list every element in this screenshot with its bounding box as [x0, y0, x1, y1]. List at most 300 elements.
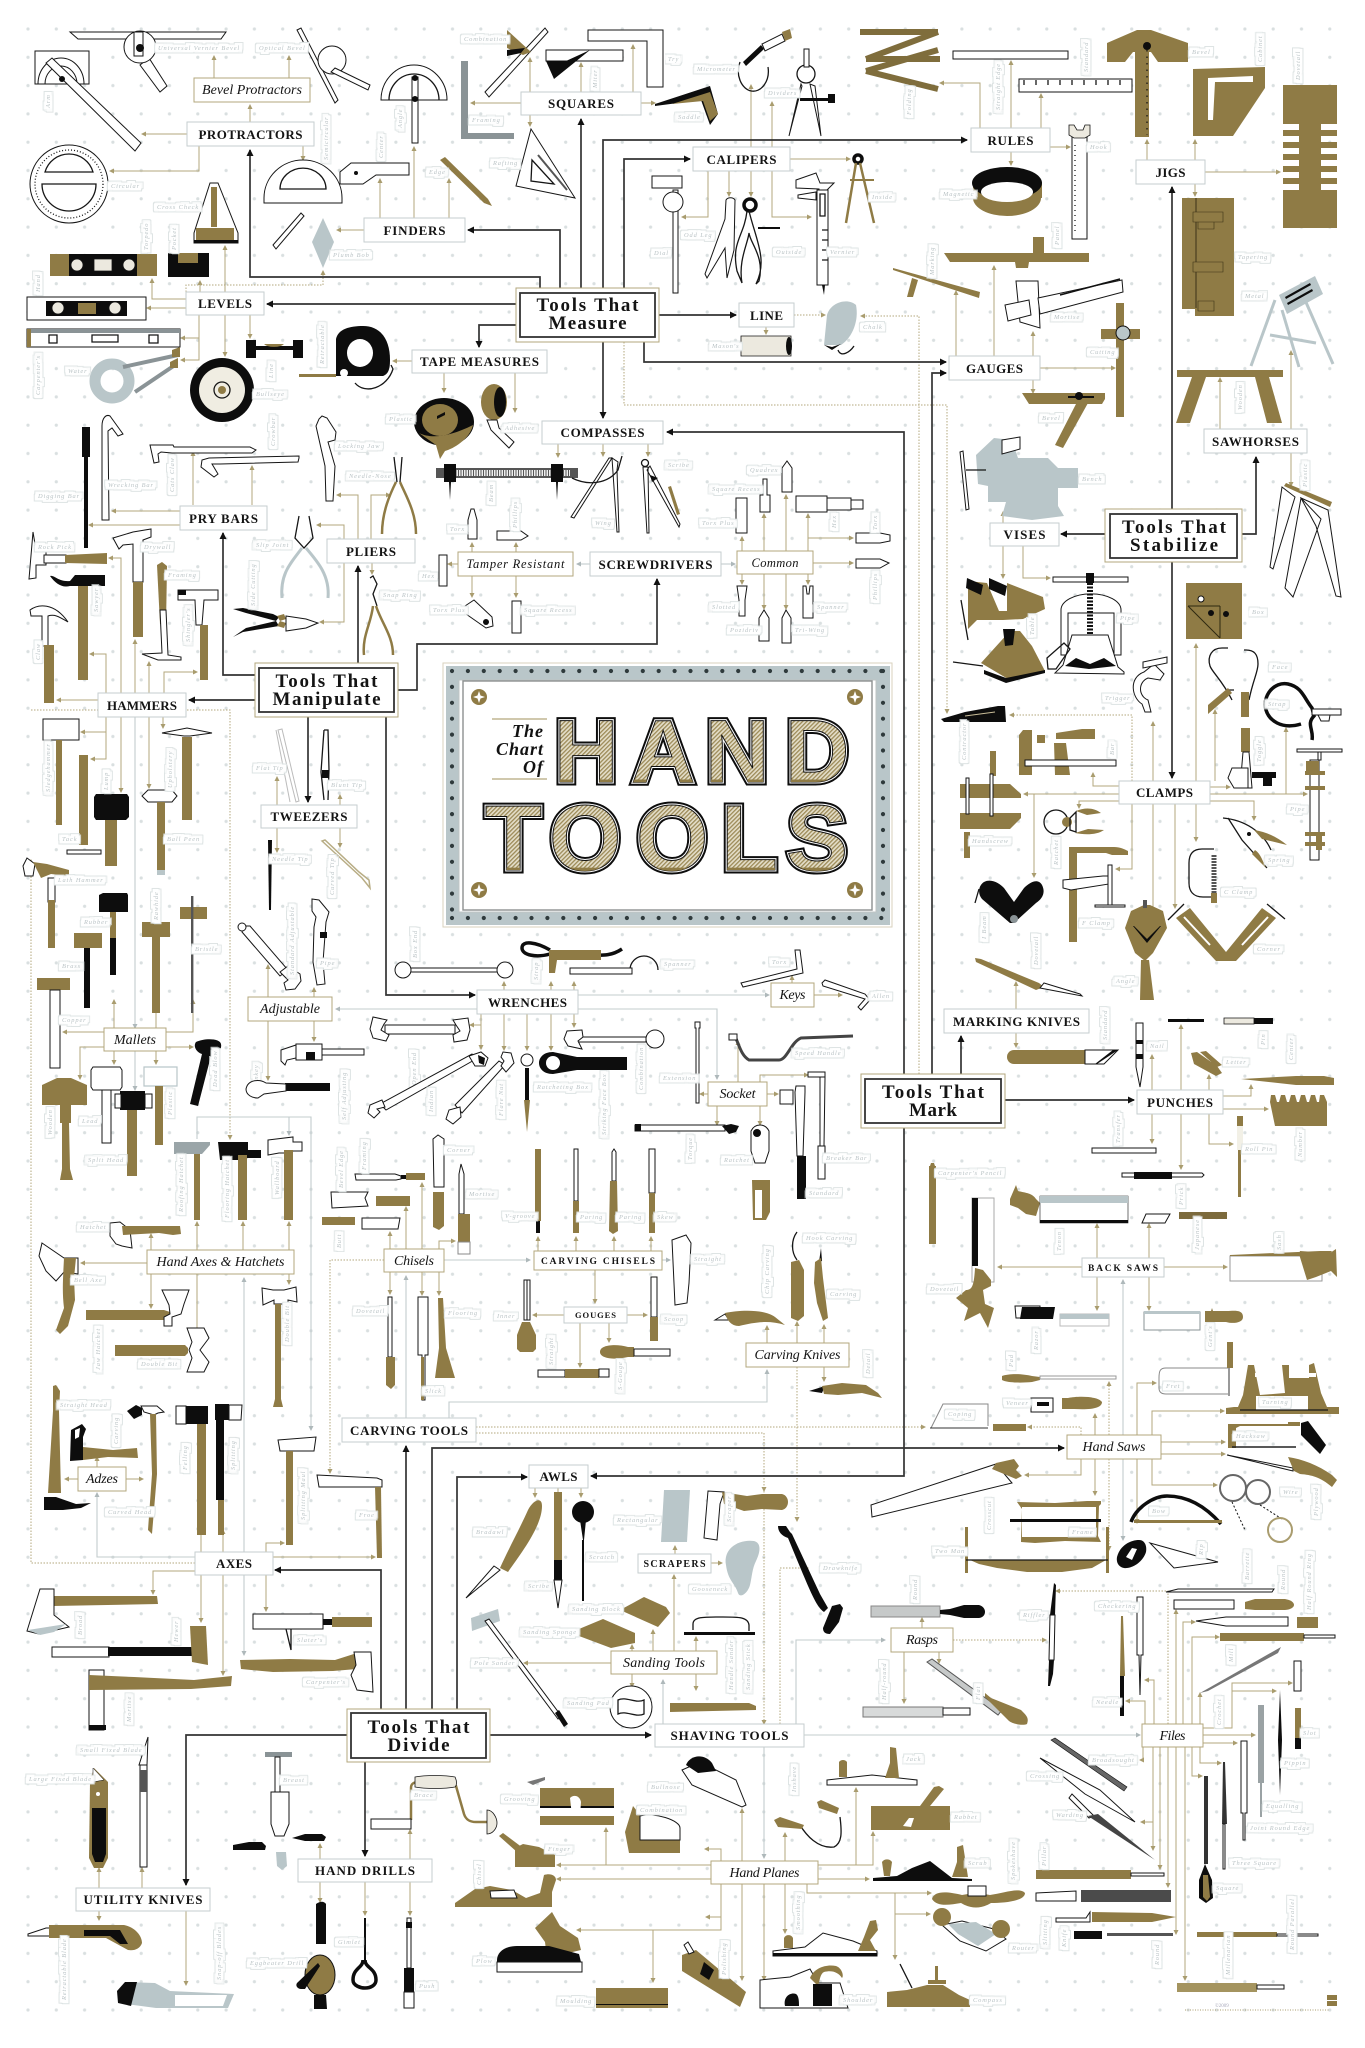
icon: cross check level [157, 183, 238, 243]
icon: wooden sawhorse: Wooden [1237, 384, 1244, 410]
icon: straight head adze [44, 1385, 108, 1510]
icon: carving knife: Carving [830, 1291, 857, 1298]
icon: sanding pad [567, 1686, 652, 1728]
icon: open end wrench: Open End [411, 1052, 418, 1085]
label: FINDERS: FINDERS [384, 223, 446, 238]
icon: flare nut wrench [446, 1052, 514, 1124]
icon: butt chisel [322, 1217, 400, 1248]
icon: butt chisel: Butt [336, 1234, 343, 1248]
icon: flat tip tweezers: Flat Tip [255, 765, 284, 772]
icon: smoothing plane: Smoothing [795, 1895, 802, 1930]
icon: chip carving knife [715, 1248, 785, 1326]
label: PUNCHES [1137, 1090, 1223, 1114]
icon: pocket level: Pocket [171, 227, 178, 251]
icon: hand level: Hand [35, 274, 42, 293]
label: Mallets: Mallets [113, 1033, 157, 1048]
icon: push drill [404, 1918, 435, 2008]
label: CARVING TOOLS [342, 1418, 476, 1442]
icon: split head mallet: Split Head [88, 1157, 124, 1164]
icon: sanding sponge [523, 1619, 635, 1648]
icon: veneer saw [1006, 1397, 1102, 1412]
main category: Tools That Divide: Divide [388, 1735, 450, 1756]
icon: straight gouge [538, 1337, 609, 1378]
icon: pippin file [1278, 1690, 1306, 1795]
icon: tri-wing bit [782, 610, 825, 643]
label: SAWHORSES [1204, 429, 1307, 453]
icon: hacksaw [1228, 1421, 1326, 1454]
icon: adhesive tape measure [481, 384, 535, 448]
icon: wooden sawhorse [1176, 370, 1283, 423]
icon: ratchet wrench: Ratchet [723, 1157, 750, 1164]
icon: toggle clamp: Toggle [1256, 739, 1263, 762]
icon: slip joint pliers [256, 516, 328, 598]
icon: drawknife: Drawknife [822, 1565, 858, 1572]
icon: rectangular scraper [616, 1490, 690, 1542]
label: TWEEZERS: TWEEZERS [270, 809, 348, 824]
label: PROTRACTORS [187, 122, 314, 146]
label: SQUARES [521, 92, 641, 115]
icon: pillar file: Pillar [1041, 1846, 1048, 1867]
icon: scribe compass: Scribe [668, 462, 690, 469]
label: RULES [971, 128, 1050, 152]
icon: sawyer hammer: Sawyer [93, 588, 100, 612]
icon: tack hammer: Tack [62, 836, 77, 843]
icon: pad saw [1002, 1354, 1116, 1383]
icon: tri-wing bit: Tri-Wing [795, 627, 825, 634]
icon: scratch awl: Scratch [589, 1554, 615, 1561]
icon: hex extension bit: Hex [831, 515, 838, 529]
label: Bevel Protractors [194, 78, 310, 102]
icon: hook rule: Hook [1089, 144, 1107, 151]
icon: bullseye level [190, 358, 285, 422]
icon: bullnose plane [651, 1756, 746, 1807]
icon: bristle mallet: Bristle [195, 946, 218, 953]
icon: C clamp: C Clamp [1224, 889, 1253, 896]
label: GAUGES [949, 356, 1040, 380]
icon: bench vise [960, 437, 1102, 520]
screws [471, 689, 863, 898]
label: VISES: VISES [1004, 527, 1046, 542]
icon: crosscut saw: Crosscut [986, 1500, 993, 1530]
tool group: rules [860, 32, 1132, 239]
icon: coping saw [930, 1404, 1026, 1431]
icon: millenary file [1197, 1932, 1318, 1976]
icon: hook carving knife [791, 1232, 853, 1321]
main category: Tools That Mark [861, 1074, 1005, 1128]
icon: C clamp [1189, 849, 1253, 903]
icon: hatchet: Hatchet [79, 1224, 107, 1231]
icon: rip saw [1117, 1540, 1218, 1568]
icon: retractable tape measure: Retractable [319, 324, 326, 365]
title text: TOOLS: TOOLS [485, 786, 848, 890]
icon: pole sander: Pole Sander [473, 1660, 515, 1667]
icon: pin punch [1168, 1018, 1273, 1046]
icon: plumb bob [273, 213, 370, 268]
icon: tack hammer [62, 755, 101, 854]
icon: checkering file [1098, 1597, 1143, 1695]
icon: barrette file [1166, 1552, 1274, 1592]
icon: dovetail jig: Dovetail [1295, 51, 1302, 81]
label: Socket [708, 1082, 767, 1106]
icon: push drill: Push [418, 1983, 435, 1990]
label: PUNCHES: PUNCHES [1147, 1095, 1213, 1110]
icon: inner gouge [496, 1280, 536, 1352]
icon: lump hammer: Lump [103, 772, 110, 791]
label: PRY BARS [180, 506, 267, 530]
icon: barrette file: Barrette [1244, 1552, 1251, 1580]
label: Keys [771, 983, 814, 1007]
label: SHAVING TOOLS [655, 1724, 804, 1747]
label: Chisels: Chisels [394, 1254, 435, 1269]
icon: vernier calipers [796, 173, 855, 295]
icon: gimlet [338, 1918, 376, 1988]
icon: shoulder plane: Shoulder [843, 1997, 873, 2004]
label: Hand Planes: Hand Planes [728, 1866, 800, 1881]
title text: TOOLS: TOOLS [485, 786, 848, 890]
icon: torx key: Torx [772, 959, 787, 966]
icon: framing hammer: Framing [167, 572, 197, 579]
icon: bevel gauge: Bevel [1042, 415, 1061, 422]
icon: wooden mallet [42, 1078, 87, 1180]
icon: mill file: Mill [1228, 1648, 1235, 1663]
icon: nail punch [1136, 1023, 1165, 1087]
icon: outside calipers: Outside [776, 249, 802, 256]
icon: slitting file [1036, 1890, 1171, 1945]
icon: tenon saw: Tenon [1056, 1231, 1063, 1251]
icon: box end wrench: Box End [412, 930, 419, 958]
icon: paring tall chisel: Paring [618, 1214, 642, 1221]
tool group: jigs [1107, 30, 1337, 316]
icon: strap clamp: Strap [1268, 701, 1286, 708]
icon: detail knife: Detail [865, 1353, 872, 1375]
icon: needle file: Needle [1095, 1699, 1119, 1706]
icon: polishing plane: Polishing [721, 1942, 728, 1976]
icon: corner clamp [1168, 904, 1285, 961]
icon: common phillips bit: Phillips [872, 573, 879, 601]
label: LEVELS [186, 292, 264, 315]
icon: combination wrench [564, 1030, 664, 1090]
icon: slotted bit: Slotted [712, 604, 736, 611]
icon: scribe compass [642, 460, 690, 533]
label: AWLS: AWLS [540, 1469, 578, 1484]
icon: flooring chisel: Flooring [447, 1310, 478, 1317]
icon: bevel edge chisel [331, 1150, 410, 1208]
icon: plow plane: Plow [475, 1958, 493, 1965]
tool group: protractors [30, 28, 492, 268]
label: PROTRACTORS: PROTRACTORS [198, 127, 302, 142]
icon: straight head adze: Straight Head [60, 1402, 108, 1409]
tool group: mallets [37, 978, 221, 1180]
icon: curved head axe [108, 1405, 164, 1534]
icon: odd leg calipers: Odd Leg [684, 232, 712, 239]
icon: joint round edge file: Joint Round Edge [1250, 1825, 1310, 1832]
icon: turning saw: Turning [1262, 1399, 1289, 1406]
icon: scorp: Inshave [791, 1766, 798, 1793]
icon: flat tip tweezers [255, 729, 299, 802]
icon: straight edge: Straight Edge [995, 63, 1002, 110]
icon: skew chisel [649, 1149, 674, 1233]
icon: bell axe [39, 1243, 103, 1334]
icon: magnetic tape [942, 167, 1042, 216]
icon: contractor clamp: Contractor [961, 723, 968, 760]
icon: torque wrench [635, 1124, 739, 1160]
label: PRY BARS: PRY BARS [189, 511, 258, 526]
icon: chalkstone jig [1193, 35, 1265, 136]
label: WRENCHES [477, 990, 578, 1014]
icon: marking gauge [893, 247, 980, 298]
icon: veneer saw: Veneer [1006, 1400, 1029, 1407]
icon: wallboard hatchet [268, 1137, 302, 1220]
tool group: hammers [23, 529, 218, 1013]
icon: scoop gouge [650, 1277, 684, 1341]
main category: Tools That Stabilize: Tools That [1122, 517, 1227, 538]
icon: rectangular scraper: Rectangular [616, 1517, 658, 1524]
icon: mortise chisel [458, 1164, 495, 1254]
icon: curved head axe: Curved Head [108, 1509, 152, 1516]
title text: The Chart Of: Of [523, 757, 545, 777]
icon: saddle square [655, 86, 718, 125]
icon: brad awl [466, 1500, 542, 1598]
icon: plastic tape measure: Plastic [388, 416, 413, 423]
icon: standard adjustable wrench [238, 906, 301, 990]
tool group: awls and scrapers [466, 1490, 858, 1728]
icon: box end wrench [395, 930, 513, 978]
icon: double bit hatchet: Double Bit [140, 1361, 178, 1368]
icon: slick chisel [418, 1297, 442, 1400]
icon: joint round edge file [1241, 1741, 1310, 1840]
tool group: files [1022, 1552, 1335, 1992]
label: JIGS [1136, 160, 1205, 184]
icon: carpenter's pencil: Carpenter's Pencil [938, 1170, 1002, 1177]
title text: HAND: HAND [554, 701, 849, 801]
icon: brace [371, 1776, 497, 1834]
label: Sanding Tools: Sanding Tools [623, 1656, 706, 1671]
icon: bullseye level: Bullseye [256, 391, 285, 398]
icon: snap-off blade knife: Snap-off Blades [216, 1926, 223, 1980]
icon: crochet file [1200, 1647, 1281, 1725]
icon: three square file: Three Square [1232, 1860, 1277, 1867]
icon: lump hammer [94, 772, 129, 866]
icon: wooden mallet: Wooden [47, 1109, 54, 1135]
icon: corner chisel [433, 1135, 471, 1230]
icon: router plane [933, 1908, 1035, 1952]
icon: common torx plus bit [702, 498, 747, 533]
icon: scribe awl [528, 1492, 562, 1608]
label: Files: Files [1158, 1729, 1186, 1744]
icon: mortise gauge [1005, 279, 1123, 328]
icon: handle sander [684, 1617, 755, 1691]
label: HAMMERS: HAMMERS [107, 698, 177, 713]
icon: paring tall chisel [609, 1149, 642, 1234]
icon: carpenter's level [27, 329, 180, 395]
icon: pipe clamp: Pipe [1289, 806, 1305, 813]
label: RULES: RULES [988, 133, 1034, 148]
icon: rock pick [29, 532, 107, 579]
icon: center punch [1241, 1037, 1334, 1085]
icon: smoothing plane [773, 1895, 878, 1956]
icon: needle tip tweezers [268, 840, 309, 910]
label: HAND DRILLS [298, 1859, 432, 1882]
icon: roofing hatchet [174, 1142, 210, 1220]
icon: torx plus bit: Torx Plus [433, 607, 466, 614]
icon: knife handle file: Slot [1303, 1730, 1317, 1737]
icon: pipe vise [1047, 573, 1135, 674]
icon: torque wrench: Torque [687, 1137, 694, 1160]
label: GOUGES [564, 1307, 627, 1323]
icon: retractable blade knife [28, 1925, 142, 2001]
tool group: keys and sockets [635, 950, 890, 1220]
icon: common torx plus bit: Torx Plus [702, 520, 735, 527]
icon: paring carving chisel [573, 1149, 603, 1233]
label: SCRAPERS: SCRAPERS [644, 1559, 706, 1570]
icon: framing hammer [142, 562, 197, 660]
icon: pippin file: Pippin [1283, 1760, 1306, 1767]
icon: panel gauge [944, 226, 1089, 268]
icon: wire saw: Wire [1283, 1489, 1298, 1496]
icon: standard adjustable wrench: Standard Adjustable [289, 906, 296, 975]
icon: felling axe [176, 1406, 208, 1535]
icon: round rasp [871, 1579, 985, 1618]
icon: handscrew clamp [960, 751, 1021, 858]
icon: F clamp: F Clamp [1081, 920, 1111, 927]
icon: jaw hatchet [86, 1290, 189, 1370]
icon: half round rasp [863, 1662, 970, 1717]
icon: vernier calipers: Vernier [830, 249, 855, 256]
tool group: back saws [929, 1185, 1337, 1351]
icon: scribe awl: Scribe [528, 1583, 550, 1590]
icon: semicircular protractor [264, 116, 342, 203]
icon: grooving plane: Grooving [504, 1796, 535, 1803]
icon: ratcheting box wrench: Ratcheting Box [536, 1084, 589, 1091]
icon: side cutting pliers [233, 563, 318, 637]
label: CLAMPS [1119, 781, 1210, 804]
main category: Tools That Divide: Tools That [368, 1717, 470, 1738]
label: SCREWDRIVERS: SCREWDRIVERS [598, 557, 712, 572]
tool group: line and gauges [711, 226, 1140, 448]
tool group: punches and pencil [929, 1018, 1334, 1244]
icon: locking jaw pliers [316, 416, 380, 501]
icon: bevel jig [1107, 30, 1211, 137]
icon: circular protractor [30, 145, 140, 223]
icon: optical bevel: Optical Bevel [259, 45, 306, 52]
icon: lath hammer [23, 858, 104, 948]
icon: allen key [822, 980, 890, 1010]
icon: carving knife straight [672, 1235, 722, 1305]
icon: spokeshave: Spokeshave [1010, 1841, 1017, 1880]
label: SHAVING TOOLS: SHAVING TOOLS [670, 1728, 788, 1743]
icon: spanner bit: Spanner [817, 604, 845, 611]
label: Keys: Keys [778, 988, 806, 1003]
icon: try square [588, 30, 679, 87]
icon: frame saw [1010, 1501, 1101, 1543]
icon: scrub plane [873, 1845, 987, 1881]
icon: dividers [767, 49, 835, 136]
icon: lead mallet: Lead [81, 1118, 98, 1125]
icon: line level: Line [268, 363, 275, 379]
icon: scorp [774, 1766, 841, 1847]
icon: framing square: Framing [471, 117, 501, 124]
icon: wire saw [1220, 1475, 1298, 1542]
label: Carving Knives [746, 1343, 849, 1367]
icon: carpenter's axe [240, 1652, 373, 1692]
icon: bullnose plane: Bullnose [651, 1784, 681, 1791]
icon: coping saw: Coping [948, 1411, 972, 1418]
label: MARKING KNIVES [944, 1009, 1089, 1033]
icon: spokeshave [932, 1841, 1025, 1908]
label: GOUGES: GOUGES [575, 1310, 616, 1320]
icon: pillar file [1036, 1846, 1164, 1879]
tool group: sawhorses [1176, 276, 1341, 597]
icon: corner chisel: Corner [447, 1147, 471, 1154]
icon: pipe clamp [1289, 749, 1342, 860]
icon: common torx bit: Torx [872, 515, 879, 530]
icon: mason's line: Mason's [711, 343, 740, 350]
label: TAPE MEASURES [412, 350, 547, 373]
icon: phillips bit [497, 501, 528, 540]
label: Adjustable [248, 997, 332, 1021]
icon: chalkstone jig: Cabinet [1257, 35, 1264, 62]
icon: cutting gauge [1090, 303, 1140, 417]
icon: framing chisel [355, 1141, 425, 1180]
icon: try square: Try [668, 56, 679, 63]
icon: felling axe: Felling [182, 1445, 189, 1471]
icon: froe: Froe [358, 1512, 375, 1519]
icon: metal sawhorse: Metal [1244, 293, 1264, 300]
icon: broad axe [27, 1589, 158, 1635]
icon: slater's axe: Slater's [297, 1637, 323, 1644]
icon: square recess bit [512, 601, 573, 633]
icon: knife file: Knife [1061, 1929, 1068, 1948]
icon: monkey wrench: Monkey [253, 1064, 260, 1091]
section label: sign-off: ©2009 [1215, 2003, 1229, 2009]
icon: dovetail marking knife: Dovetail [1033, 936, 1040, 966]
icon: framing square [461, 61, 514, 139]
icon: socket extension [662, 1022, 700, 1103]
label: COMPASSES [542, 421, 663, 444]
connectors: grey branch lines [97, 564, 1140, 1858]
icon: optical bevel [259, 28, 370, 103]
title text: The Chart Of [492, 719, 547, 779]
icon: chisel plane [455, 1863, 556, 1907]
icon: large round file [1177, 1898, 1296, 1992]
icon: pocket level [168, 227, 209, 277]
icon: ratcheting box wrench [521, 1054, 589, 1132]
icon: broad axe: Broad [77, 1615, 84, 1635]
icon: carving knife straight: Straight [694, 1256, 722, 1263]
icon: plastic sawhorse [1270, 463, 1341, 597]
icon: scoop gouge: Scoop [664, 1316, 684, 1323]
icon: sawyer hammer [50, 575, 105, 680]
title text: The Chart Of: The [512, 721, 544, 741]
icon: brad awl: Bradawl [476, 1529, 504, 1536]
icon: wing compass: Wing [595, 520, 612, 527]
icon: wallboard hatchet: Wallboard [274, 1160, 281, 1195]
icon: speed handle: Speed Handle [795, 1050, 841, 1057]
icon: curved tip tweezers: Curved Tip [329, 857, 336, 895]
icon: small fixed blade knife [80, 1737, 148, 1867]
icon: finger plane: Finger [547, 1846, 571, 1853]
icon: dovetail saw: Dovetail [929, 1286, 959, 1293]
icon: wrecking bar [102, 415, 154, 520]
icon: sanding stick [670, 1643, 756, 1712]
icon: transfer punch: Transfer [1115, 1114, 1122, 1143]
label: TAPE MEASURES: TAPE MEASURES [420, 354, 539, 369]
icon: slotted bit [712, 586, 747, 616]
icon: splitting maul: Splitting Maul [300, 1471, 307, 1520]
label: SQUARES: SQUARES [548, 96, 614, 111]
icon: bar clamp: Bar [1109, 743, 1116, 755]
icon: plywood saw: Plywood [1313, 1487, 1320, 1517]
